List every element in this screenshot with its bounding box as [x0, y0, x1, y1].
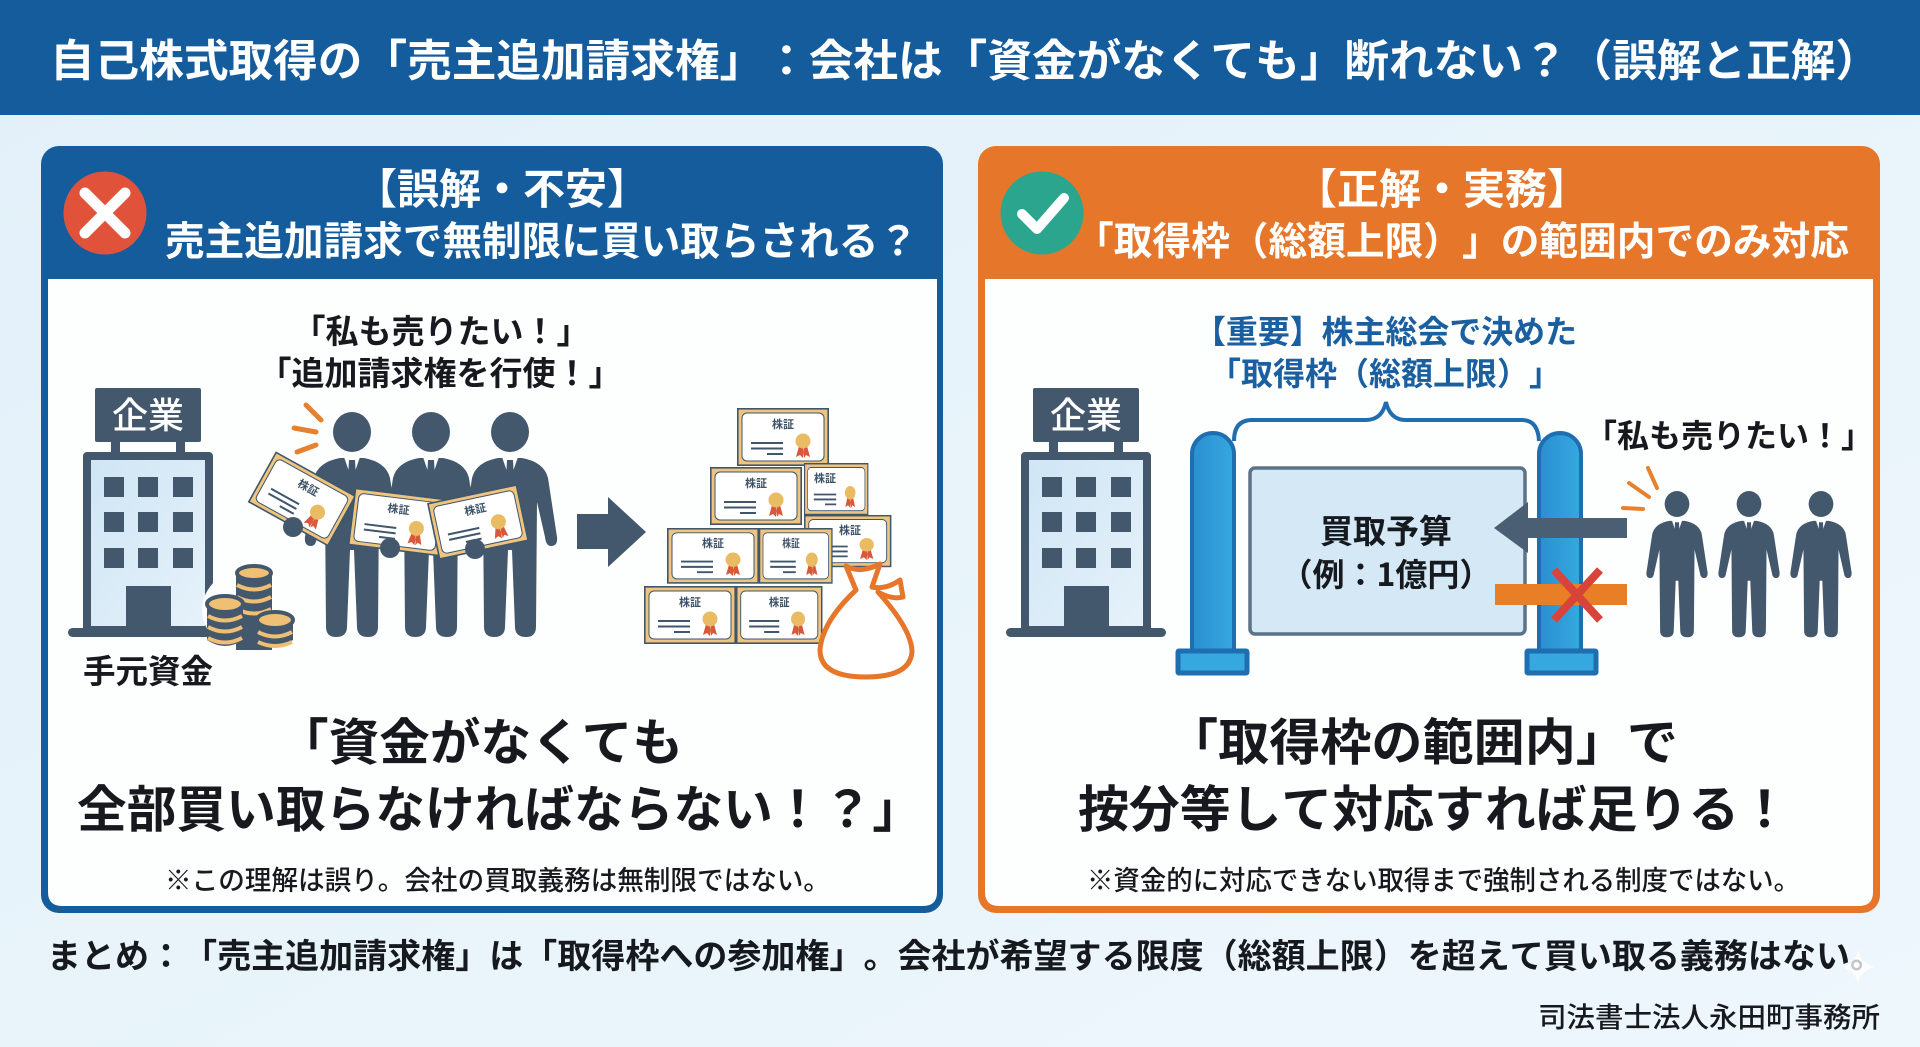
icon: sparkle watermark [1841, 950, 1875, 984]
box: purchase budget: 買取予算 [1320, 505, 1452, 553]
icon: excitement lines [294, 405, 321, 452]
panel heading: misconception: 【誤解・不安】 [355, 156, 649, 217]
panel heading: misconception [165, 156, 918, 267]
note: misconception: ※この理解は誤り。会社の買取義務は無制限ではない。 [165, 859, 830, 898]
speech quote: shareholders [258, 305, 622, 395]
panel heading: misconception: 売主追加請求で無制限に買い取らされる？ [165, 209, 918, 267]
icon: held share certificates: 株証 [463, 499, 488, 519]
icon: three shareholders [1646, 491, 1852, 637]
title banner: 自己株式取得の「売主追加請求権」：会社は「資金がなくても」断れない？（誤解と正解） [50, 25, 1880, 89]
heading: important acquisition limit [1194, 307, 1577, 395]
panel heading: correct practice: 「取得枠（総額上限）」の範囲内でのみ対応 [1075, 211, 1849, 267]
arrow: rejected excess request [1495, 570, 1627, 620]
callout: fear statement: 「資金がなくても [278, 703, 683, 775]
arrow: to purchased shares [577, 497, 646, 567]
note: correct practice: ※資金的に対応できない取得まで強制される制度ではない。 [1087, 859, 1800, 898]
icon: pile of share certificates: 株証 [814, 470, 836, 486]
speech quote: shareholders: 「私も売りたい！」 [292, 305, 590, 353]
summary text: まとめ：「売主追加請求権」は「取得枠への参加権」。会社が希望する限度（総額上限）を超えて買い取る義務はない。 [47, 929, 1884, 978]
callout: correct statement: 按分等して対応すれば足りる！ [1078, 770, 1790, 842]
icon: pile of share certificates: 株証 [769, 595, 790, 610]
box: purchase budget [1250, 468, 1525, 634]
icon: company building: 企業 [112, 387, 184, 439]
icon: pile of share certificates: 株証 [745, 475, 767, 491]
icon: money bag [820, 564, 912, 677]
icon: pile of share certificates: 株証 [772, 416, 794, 432]
icon: pile of share certificates: 株証 [839, 522, 861, 538]
callout: fear statement: 全部買い取らなければならない！？」 [77, 770, 922, 842]
icon: pile of share certificates: 株証 [782, 535, 800, 550]
icon: held share certificates [249, 452, 528, 559]
icon: held share certificates: 株証 [295, 475, 322, 500]
icon: company building [1006, 387, 1166, 637]
icon: green check badge [1000, 172, 1084, 254]
callout: correct statement [1078, 703, 1790, 842]
panel: correct practice [978, 146, 1880, 913]
icon: company building [68, 387, 228, 637]
icon: company building: 企業 [1050, 387, 1122, 439]
callout: fear statement [77, 703, 922, 842]
box: purchase budget: （例：1億円） [1281, 550, 1491, 596]
panel heading: correct practice: 【正解・実務】 [1295, 156, 1589, 217]
speech quote: shareholders: 「追加請求権を行使！」 [258, 347, 622, 395]
icon: red cross badge [64, 172, 146, 254]
icon: pile of share certificates [645, 409, 891, 643]
callout: correct statement: 「取得枠の範囲内」で [1167, 703, 1678, 775]
arrow: allowed request into budget [1494, 502, 1627, 553]
footer: firm name: 司法書士法人永田町事務所 [1538, 996, 1880, 1036]
gate: right pillar [1527, 433, 1596, 673]
icon: pile of share certificates: 株証 [702, 535, 724, 551]
icon: excitement lines [1623, 468, 1657, 509]
panel heading: correct practice [1075, 156, 1849, 267]
quote: want to sell: 「私も売りたい！」 [1585, 411, 1873, 457]
heading: important acquisition limit: 【重要】株主総会で決めた [1194, 307, 1577, 353]
icon: three shareholders [305, 412, 557, 637]
label: cash on hand: 手元資金 [83, 645, 213, 693]
panel: misconception [41, 146, 943, 913]
icon: coin stacks [202, 566, 298, 652]
icon: pile of share certificates: 株証 [679, 594, 701, 610]
icon: brace over limit [1234, 402, 1539, 441]
icon: held share certificates: 株証 [387, 500, 410, 518]
heading: important acquisition limit: 「取得枠（総額上限）」 [1209, 349, 1561, 395]
gate: left pillar [1178, 433, 1247, 673]
title banner [0, 0, 1920, 115]
